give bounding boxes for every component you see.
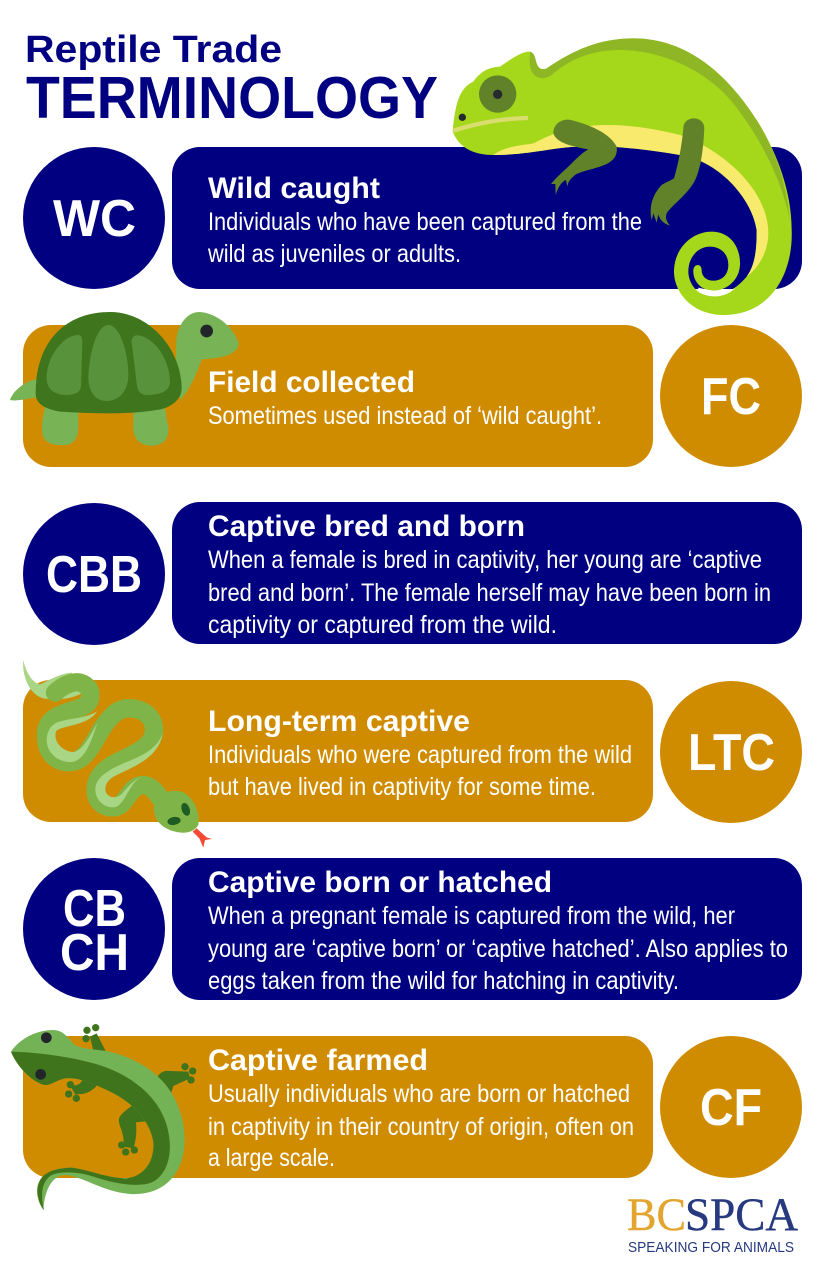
card: captive born or hatched [172, 858, 802, 1000]
card: long-term captive: Long-term captive [208, 705, 470, 738]
title: Reptile Trade [25, 29, 282, 71]
card: captive bred and born: captivity or captured from the wild. [208, 611, 557, 639]
card: captive bred and born: Captive bred and born [208, 510, 525, 543]
badge: CBB [23, 503, 165, 645]
title [25, 29, 438, 131]
badge: FC: FC [701, 368, 761, 426]
icon: tortoise [10, 312, 239, 446]
badge: WC [23, 147, 165, 289]
card: wild caught: Wild caught [208, 172, 380, 205]
panel: wild caught [23, 147, 802, 289]
card: wild caught: Individuals who have been captured from the [208, 208, 642, 236]
card: captive farmed: in captivity in their country of origin, often on [208, 1113, 634, 1141]
card: field collected [23, 325, 653, 467]
card: captive bred and born [172, 502, 802, 644]
title: TERMINOLOGY [26, 65, 438, 131]
panel: long-term captive [23, 680, 802, 823]
logo: BC SPCA [627, 1189, 798, 1256]
card: field collected: Field collected [208, 366, 415, 399]
card: long-term captive: Individuals who were captured from the wild [208, 741, 632, 769]
logo: BC SPCA: SPCA [685, 1189, 798, 1241]
card: long-term captive [23, 680, 653, 822]
badge: WC: WC [53, 190, 136, 248]
card: wild caught [172, 147, 802, 289]
card: captive farmed: Usually individuals who are born or hatched [208, 1080, 630, 1108]
panel: field collected [23, 325, 802, 467]
badge: CBB: CBB [46, 546, 142, 604]
badge: CF: CF [700, 1079, 762, 1137]
card: captive farmed: a large scale. [208, 1144, 335, 1172]
panel: captive bred and born [23, 502, 802, 645]
panel: captive farmed [23, 1036, 802, 1178]
card: field collected: Sometimes used instead of ‘wild caught’. [208, 402, 602, 430]
card: captive born or hatched: eggs taken from the wild for hatching in captivity. [208, 967, 679, 995]
icon: chameleon [453, 38, 792, 315]
logo: BC SPCA: SPEAKING FOR ANIMALS [628, 1239, 794, 1256]
card: captive bred and born: When a female is bred in captivity, her young are ‘captive [208, 546, 762, 574]
badge: CF [660, 1036, 802, 1178]
icon: gecko [11, 1024, 196, 1210]
logo: BC SPCA: BC [627, 1189, 686, 1241]
badge: LTC [660, 681, 802, 823]
card: captive born or hatched: Captive born or hatched [208, 866, 552, 899]
card: long-term captive: but have lived in captivity for some time. [208, 773, 596, 801]
badge: CB CH [23, 858, 165, 1000]
badge: FC [660, 325, 802, 467]
card: captive farmed: Captive farmed [208, 1044, 428, 1077]
icon: snake [23, 660, 212, 848]
badge: CB CH: CH [60, 924, 129, 982]
badge: LTC: LTC [688, 724, 775, 782]
badge: CB CH: CB [63, 880, 126, 938]
card: captive farmed [23, 1036, 653, 1178]
card: captive born or hatched: When a pregnant female is captured from the wild, her [208, 902, 735, 930]
panel: captive born or hatched [23, 858, 802, 1000]
card: wild caught: wild as juveniles or adults. [207, 240, 461, 268]
